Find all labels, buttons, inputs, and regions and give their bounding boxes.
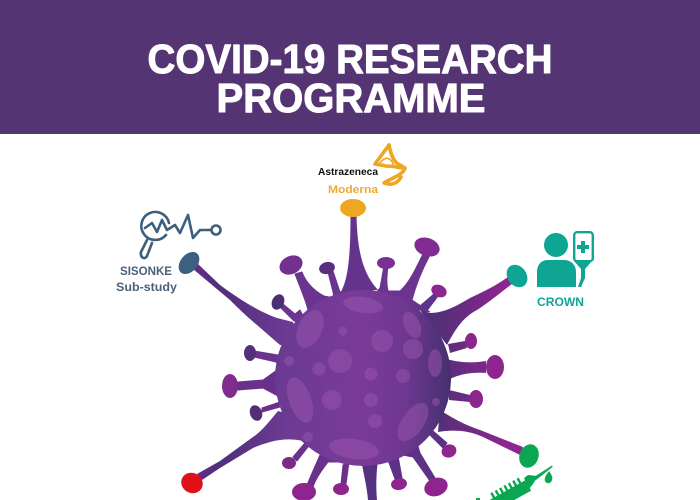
knob: teal [502,261,532,291]
title: COVID-19 RESEARCH [148,36,552,82]
icon: syringe with drop [476,466,553,500]
icon: Astrazeneca logo [375,145,405,184]
long spike: bottom [361,460,378,500]
label: SISONKE Sub-study: Sub-study [116,280,177,294]
header banner [0,0,700,134]
label: Astrazeneca: Astrazeneca [318,166,378,178]
icon: patient with IV drip [537,232,593,287]
knob: gold [340,199,366,217]
long spike: upper right [420,277,512,345]
spike knobs [174,199,542,500]
label: SISONKE Sub-study [116,264,177,294]
knob: green [516,441,542,471]
long spike: top [340,214,378,293]
small spikes lower left [238,370,349,487]
small spikes upper right [370,254,486,402]
knob: red [177,469,207,497]
small spikes upper left [254,271,352,372]
knob: slate [174,248,204,278]
label: Moderna: Moderna [328,184,379,196]
label: SISONKE Sub-study: SISONKE [120,264,172,278]
title: PROGRAMME [216,75,486,121]
long spike: upper left [193,264,300,345]
long spike: lower right [438,410,523,455]
long spike: lower left [197,411,310,480]
surface patches [281,294,442,462]
title [148,36,552,121]
icon: magnifier with waveform [141,212,220,258]
virus illustration [174,199,542,500]
label: CROWN: CROWN [537,295,584,309]
small spikes lower right [388,431,447,481]
virus body [275,290,451,466]
